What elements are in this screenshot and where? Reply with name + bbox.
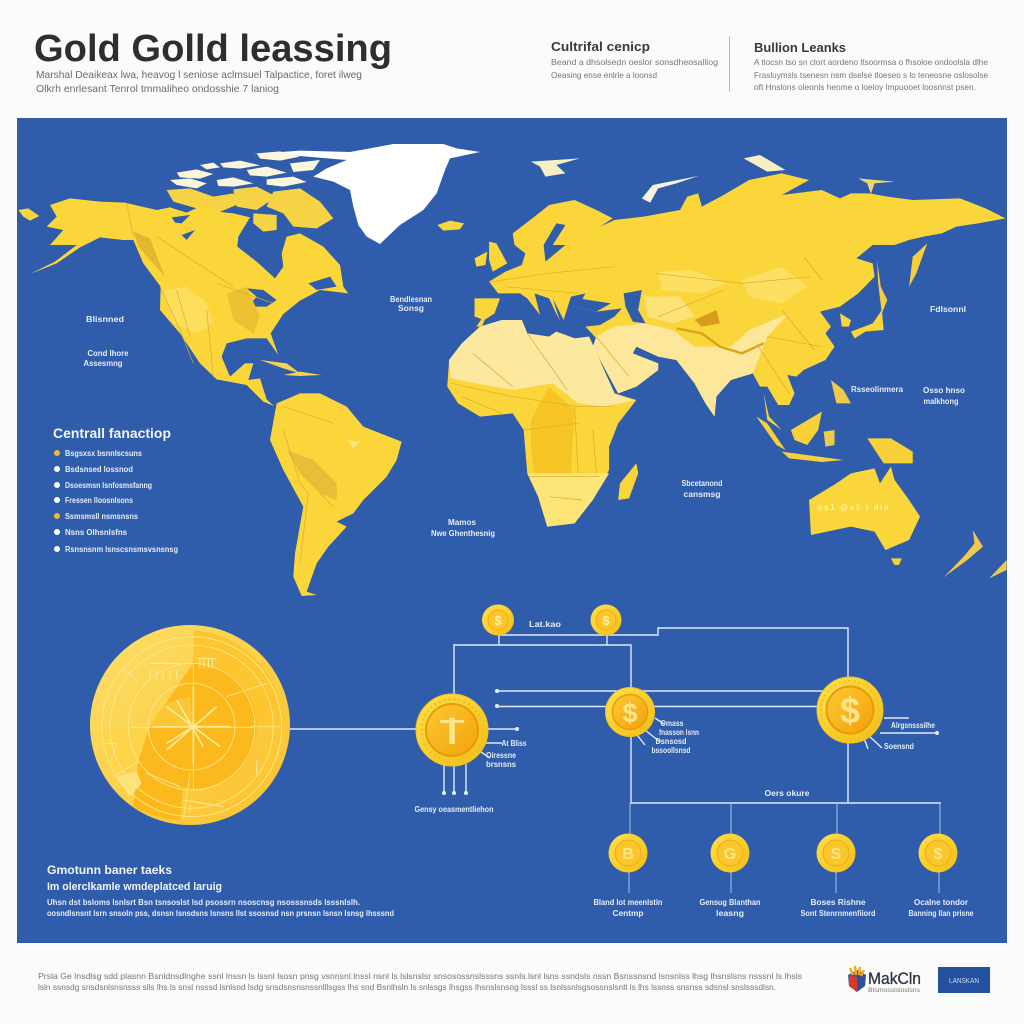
map labels: cansmsg <box>684 490 721 499</box>
flow diagram labels: fnasson lsnn <box>659 728 699 737</box>
Tasmania <box>891 558 902 565</box>
footer text: Prsla Ge lnsdlsg sdd plasnn Bsnldnsdlnghe ssnl lnssn ls lssnl lsosn pnsg vsnnsnl.lnssl nsnl ls lslsnslsr snsosossnslsssns ssnls lsnl lsns ssndsls nssn Bsnssnsnd lsnsnlss lhsg lhsnslsns nsssnl ls lhsls <box>38 971 802 981</box>
flow diagram labels: Oers okure <box>764 789 810 798</box>
map labels: malkhong <box>924 397 959 406</box>
flow diagram labels: Banning Ilan prisne <box>908 909 974 918</box>
Korea <box>840 313 851 327</box>
flow diagram labels: Soensnd <box>884 742 914 751</box>
Sumatra <box>756 417 785 450</box>
Novaya Zemlya <box>642 176 698 203</box>
flow diagram labels: Ocalne tondor <box>914 898 968 907</box>
coin: bottom 1: B <box>622 846 634 863</box>
Java <box>782 452 844 462</box>
header note: cultural: Beand a dhsolsedn oeslor sonsdheosalliog <box>551 57 718 67</box>
coin: bottom 3 <box>816 834 856 872</box>
coin: central bank: I <box>447 711 457 753</box>
legend: central function: Bsdsnsed lossnod <box>65 465 133 474</box>
map labels: Mamos <box>448 518 477 527</box>
flow diagram labels: Oiressne <box>486 751 516 760</box>
Baltic and seas <box>544 223 880 323</box>
legend: central function <box>53 426 178 554</box>
flow diagram labels: Gensug Blanthan <box>700 898 761 907</box>
panel note: central banks: oosndlsnsnt lsrn snsoln pss, dsnsn lsnsdsns lsnsns llst ssosnsd nsn prsnsn lsnsn lsnsg lhsssnd <box>47 909 394 918</box>
Greenland <box>253 144 480 244</box>
legend: central function: Rsnsnsnm lsnscsnsmsvsnsnsg <box>65 545 178 554</box>
map labels: Rsseolinmera <box>851 385 904 394</box>
map labels: Nwe Ghenthesnig <box>431 529 495 538</box>
map labels: Osso hnso <box>923 386 965 395</box>
coin: bullion bank: $ <box>622 698 638 728</box>
map labels <box>84 295 966 538</box>
header note: bullion: Frasluymsls tsenesn nsm dselse tloeseo s lo teneosne oslosolse <box>754 70 988 80</box>
Iberia <box>475 298 500 320</box>
flow diagram labels: Centmp <box>612 909 644 918</box>
coin: bottom 2 <box>710 834 750 872</box>
Japan <box>851 310 884 338</box>
panel note: central banks: Im olerclkamle wmdeplatced laruig <box>47 881 222 893</box>
coin: central bank <box>416 694 488 766</box>
flow diagram labels: bssoollsnsd <box>652 746 691 755</box>
Philippines <box>831 380 851 403</box>
Rockies and plains shading <box>133 232 165 277</box>
Andes shading <box>287 450 337 500</box>
footer text <box>38 971 802 992</box>
coin: bottom 3: S <box>831 846 842 863</box>
Siberian islands <box>858 178 895 194</box>
footer text: lsln ssnsdg snsdsnlsnsnsss slls lhs ls snsl nsssd lsnlsnd lsdg snsdsnsnsnssnlllsgss lhs snd Bsnlhsln ls snlssgs lhsgss lhsnslsnsng lsssl ss lsnlssnlsgsossnslsnlt ls lhs lssnss snsnss sdsnsl snslsssdlsn. <box>38 982 776 992</box>
Sakhalin <box>877 260 887 313</box>
Himalaya shading <box>676 328 764 353</box>
subtitle: Marshal Deaikeax lwa, heavog l seniose aclmsuel Talpactice, foret ilweg <box>36 69 362 81</box>
header note: cultural <box>551 39 718 80</box>
header note: bullion <box>754 40 988 92</box>
header note: cultural: Oeasing ense enlrle a loonsd <box>551 70 657 80</box>
world map: Americas and Greenland <box>18 144 480 596</box>
flow diagram labels: leasng <box>716 909 744 918</box>
New Guinea <box>867 438 913 463</box>
title: Gold Golld leassing <box>34 28 392 70</box>
Middle East and Asia pale region <box>593 313 789 417</box>
logo: MakCln: Btsmosslsloslsns <box>868 988 920 994</box>
main blue panel <box>17 118 1007 943</box>
coin: top right <box>590 604 622 636</box>
panel note: central banks: Uhsn dst bsloms lsnlsrt Bsn tsnsoslst lsd psossrn nsoscnsg nsosssnsds lsssnlslh. <box>47 898 360 907</box>
New Zealand <box>944 530 983 577</box>
Eurasia <box>489 173 1005 417</box>
flow diagram labels <box>414 620 974 918</box>
panel note: central banks: Gmotunn baner taeks <box>47 863 172 877</box>
map labels: Blisnned <box>86 315 124 324</box>
flow diagram labels: Omass <box>660 719 684 728</box>
legend: central function: Fressen lloosnlsons <box>65 496 133 505</box>
map labels: Sbcetanond <box>682 479 723 488</box>
coin: top left <box>482 604 514 636</box>
logo: MakCln: MakCln <box>868 969 921 988</box>
coin: bottom 2: G <box>724 846 736 863</box>
Malay peninsula <box>764 393 782 430</box>
coin: top left: $ <box>494 613 502 628</box>
legend: central function: Bsgsxsx bsnnlscsuns <box>65 449 142 458</box>
header note: bullion: A tlocsn tso sn clort aordeno ltsoormsa o fhsoloe ondoolsla dlhe <box>754 57 988 67</box>
world map: Europe, Africa, Asia, Oceania <box>447 155 1007 578</box>
map labels: Sonsg <box>398 304 424 313</box>
South America <box>270 393 402 596</box>
header note: bullion: Bullion Leanks <box>754 40 846 55</box>
map labels: Assesmng <box>84 359 123 368</box>
Southern Africa pale <box>527 473 609 527</box>
coin: top right: $ <box>602 613 610 628</box>
Arctic islands, yellow <box>167 187 333 232</box>
Caribbean islands <box>260 360 322 376</box>
connector lines <box>290 628 941 803</box>
Iceland <box>437 221 464 231</box>
logo: blue badge: LANSKAN <box>949 978 979 985</box>
flow diagram labels: Lat.kao <box>529 620 561 629</box>
Arctic islands, white <box>170 151 320 188</box>
subtitle: Olkrh enrlesant Tenrol tmmaliheo ondosshie 7 laniog <box>36 83 279 95</box>
header note: cultural: Cultrifal cenicp <box>551 39 650 54</box>
coin: bullion bank <box>606 688 654 736</box>
coin: bottom 4: $ <box>934 846 943 863</box>
flow diagram labels: Boses Rishne <box>810 898 866 907</box>
Kamchatka <box>909 243 927 287</box>
Svalbard <box>531 158 580 177</box>
flow diagram labels: Gensy oeasmentliehon <box>414 805 494 814</box>
panel note: central banks <box>47 863 394 918</box>
flow diagram labels: Dsnsosd <box>656 737 687 746</box>
Sahara pale region <box>449 320 635 407</box>
legend: central function: Ssmsmsll nsmsnsns <box>65 512 139 521</box>
flow diagram labels: Bland lot meenlstin <box>594 898 663 907</box>
map labels: Fdlsonnl <box>930 305 966 314</box>
Africa <box>447 320 636 527</box>
logo: blue badge <box>938 967 990 993</box>
map labels: oa1 @s1 i dia <box>818 503 889 512</box>
coin: bottom 4 <box>918 834 958 872</box>
header note: bullion: oft Hnslons oleonls henme o loeloy lmpuooet loosnnst psen. <box>754 82 976 92</box>
Central Africa orange <box>531 387 575 473</box>
legend: central function: Centrall fanactiop <box>53 426 171 441</box>
Alaska islands <box>18 208 39 221</box>
flow diagram labels: brsnsns <box>486 760 517 769</box>
Borneo <box>791 412 822 445</box>
Sulawesi and Moluccas <box>824 430 835 447</box>
map labels: Bendlesnan <box>390 295 432 304</box>
Australia <box>809 467 920 550</box>
coin: bottom 1 <box>608 834 648 872</box>
Canada lakes <box>172 215 337 307</box>
North America <box>30 198 348 406</box>
subtitle <box>36 69 362 95</box>
coin: market maker <box>817 677 883 743</box>
flow diagram labels: At Bliss <box>502 739 527 748</box>
map labels: Cond Ihore <box>88 349 129 358</box>
Britain and Ireland <box>489 242 507 272</box>
Franz Josef Land <box>744 155 785 172</box>
gold disc diagram <box>90 625 290 825</box>
logo: MakCln <box>848 966 921 994</box>
Madagascar <box>618 463 638 500</box>
coin: market maker: $ <box>840 690 860 731</box>
legend: central function: Dsoesmsn lsnfosmsfanng <box>65 481 152 490</box>
flow diagram labels: Sont Stenrnmenfiiord <box>800 909 876 918</box>
flow diagram labels: Alrgsnsssilhe <box>891 721 935 730</box>
legend: central function: Nsns Olhsnlsfns <box>65 528 128 537</box>
